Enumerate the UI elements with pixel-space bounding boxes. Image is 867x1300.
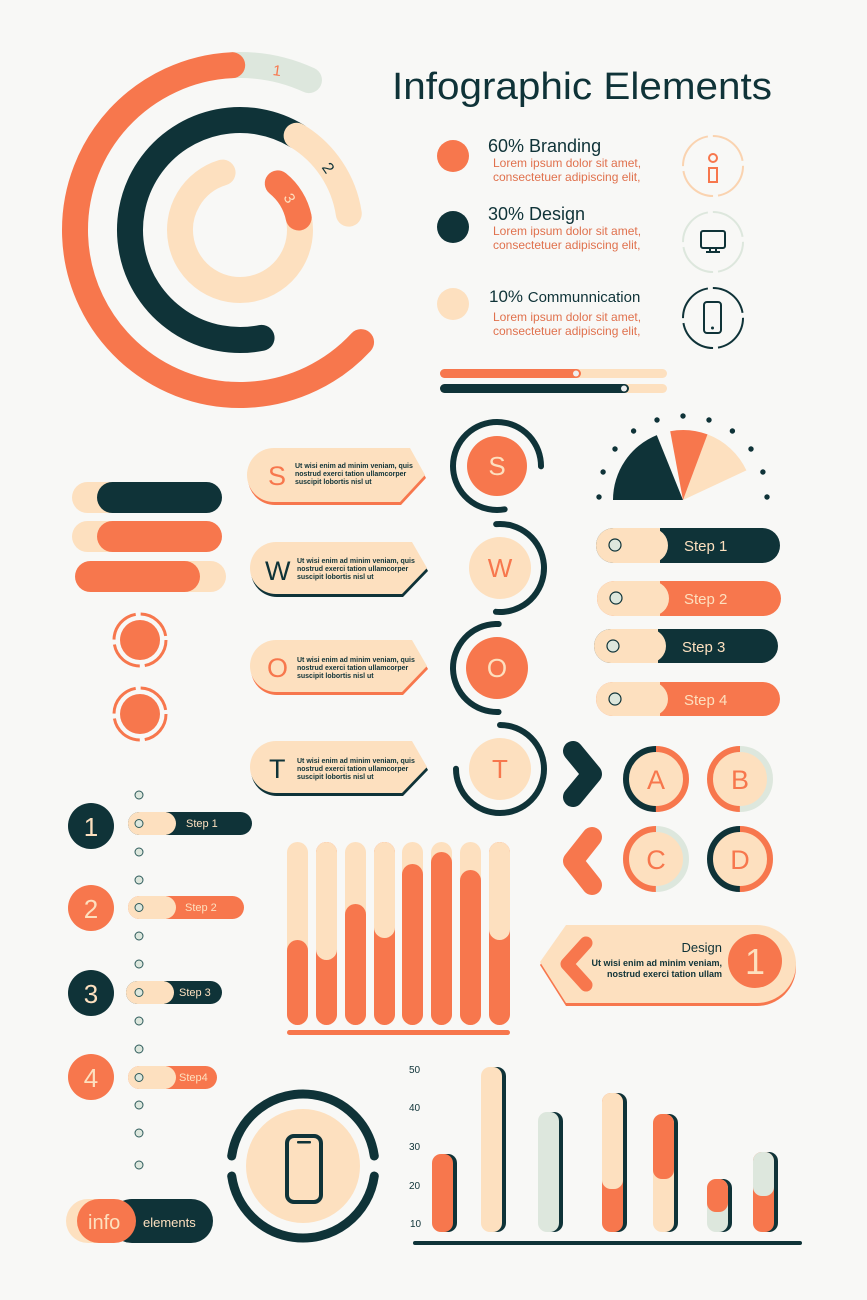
SWOT card W: W bbox=[265, 556, 291, 586]
legend: design bbox=[437, 204, 641, 252]
SWOT card S: S bbox=[268, 461, 286, 491]
radial ring chart: 3 bbox=[280, 191, 299, 206]
legend: branding bbox=[437, 136, 641, 184]
SWOT circles: T bbox=[492, 754, 508, 784]
design card bbox=[540, 925, 796, 1006]
bottom bar chart bbox=[409, 1065, 802, 1245]
phone circle icon bbox=[222, 1085, 384, 1247]
step toggles right: Step 3 bbox=[682, 639, 725, 656]
design card: Design bbox=[682, 940, 722, 955]
legend: branding: Lorem ipsum dolor sit amet, bbox=[493, 156, 641, 170]
SWOT card S bbox=[247, 448, 426, 505]
bottom bar chart: 10 bbox=[410, 1219, 422, 1230]
legend: branding: 60% Branding bbox=[488, 136, 601, 156]
SWOT circles: O bbox=[487, 653, 507, 683]
legend: communication: Lorem ipsum dolor sit amet, bbox=[493, 310, 641, 324]
bottom bar chart: 20 bbox=[409, 1181, 421, 1192]
step toggles right: Step 1 bbox=[684, 538, 727, 555]
design card: 1 bbox=[745, 941, 765, 982]
legend: communication: 10% Communnication bbox=[489, 287, 640, 306]
legend: branding: consectetuer adipiscing elit, bbox=[493, 170, 640, 184]
vertical bar chart bbox=[287, 842, 510, 1035]
title: Infographic Elements bbox=[392, 66, 772, 108]
step list left: numbered steps: 3 bbox=[84, 979, 98, 1009]
SWOT card T: suscipit lobortis nisl ut bbox=[297, 774, 374, 781]
ABCD circles: A bbox=[647, 765, 665, 795]
SWOT card S: nostrud exerci tation ullamcorper bbox=[295, 471, 407, 478]
SWOT card O: O bbox=[267, 653, 288, 683]
info elements pill bbox=[66, 1199, 213, 1243]
SWOT card W: suscipit lobortis nisl ut bbox=[297, 574, 374, 581]
SWOT card T: nostrud exerci tation ullamcorper bbox=[297, 766, 409, 773]
step list left: numbered steps bbox=[68, 803, 252, 1100]
icon: phone bbox=[683, 288, 743, 348]
ABCD circles: B bbox=[731, 765, 749, 795]
SWOT card S: Ut wisi enim ad minim veniam, quis bbox=[295, 463, 413, 470]
step list left: dotted line bbox=[135, 791, 143, 1169]
dashed circle icons bbox=[114, 614, 166, 740]
info elements pill: elements bbox=[143, 1215, 196, 1230]
step list left: numbered steps: 1 bbox=[84, 812, 98, 842]
SWOT card T: Ut wisi enim ad minim veniam, quis bbox=[297, 758, 415, 765]
SWOT card S: suscipit lobortis nisl ut bbox=[295, 479, 372, 486]
arrow: left chevron bbox=[573, 837, 592, 885]
legend: communication: consectetuer adipiscing elit, bbox=[493, 324, 640, 338]
ABCD circles: D bbox=[730, 845, 750, 875]
ABCD circles: C bbox=[646, 845, 666, 875]
arrow: right chevron bbox=[573, 751, 592, 797]
SWOT circles bbox=[446, 415, 548, 813]
step list left: numbered steps: Step 3 bbox=[179, 987, 211, 999]
SWOT card W: Ut wisi enim ad minim veniam, quis bbox=[297, 558, 415, 565]
legend: design: 30% Design bbox=[488, 204, 585, 224]
design card: nostrud exerci tation ullam bbox=[607, 969, 722, 979]
step list left: numbered steps: Step 1 bbox=[186, 818, 218, 830]
legend: design: Lorem ipsum dolor sit amet, bbox=[493, 224, 641, 238]
progress bars bbox=[440, 369, 667, 393]
SWOT card T bbox=[250, 741, 428, 796]
legend: design: consectetuer adipiscing elit, bbox=[493, 238, 640, 252]
legend: communication bbox=[437, 287, 641, 338]
info elements pill: info bbox=[88, 1212, 120, 1234]
ABCD circles bbox=[626, 749, 770, 889]
SWOT circles: W bbox=[488, 553, 513, 583]
step list left: numbered steps: Step 2 bbox=[185, 902, 217, 914]
SWOT card W: nostrud exerci tation ullamcorper bbox=[297, 566, 409, 573]
radial ring chart: 2 bbox=[318, 160, 337, 177]
icon: monitor bbox=[683, 212, 743, 272]
SWOT card W bbox=[250, 542, 428, 597]
step toggles right: Step 2 bbox=[684, 591, 727, 608]
left pill bars bbox=[72, 482, 226, 592]
bottom bar chart: 50 bbox=[409, 1065, 421, 1076]
step list left: numbered steps: 4 bbox=[84, 1063, 98, 1093]
bottom bar chart: 40 bbox=[409, 1103, 421, 1114]
radial ring chart bbox=[7, 0, 473, 463]
radial ring chart: 1 bbox=[272, 62, 282, 80]
step list left: numbered steps: Step4 bbox=[179, 1072, 208, 1084]
SWOT card O: Ut wisi enim ad minim veniam, quis bbox=[297, 657, 415, 664]
icon: person bbox=[683, 136, 743, 196]
SWOT circles: S bbox=[488, 451, 506, 481]
SWOT card O bbox=[250, 640, 428, 695]
SWOT card O: nostrud exerci tation ullamcorper bbox=[297, 665, 409, 672]
gauge chart bbox=[596, 413, 770, 500]
step list left: numbered steps: 2 bbox=[84, 894, 98, 924]
step toggles right bbox=[594, 528, 781, 716]
SWOT card T: T bbox=[269, 754, 286, 784]
bottom bar chart: 30 bbox=[409, 1142, 421, 1153]
design card: Ut wisi enim ad minim veniam, bbox=[591, 958, 722, 968]
step toggles right: Step 4 bbox=[684, 692, 727, 709]
SWOT card O: suscipit lobortis nisl ut bbox=[297, 673, 374, 680]
